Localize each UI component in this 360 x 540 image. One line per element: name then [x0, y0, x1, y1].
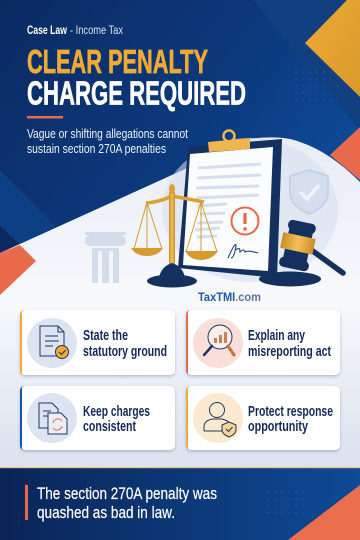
subtitle: [27, 127, 188, 156]
icon: magnifier chart: [204, 325, 234, 355]
footer band: [0, 467, 360, 540]
document lines: [195, 164, 261, 237]
title: [27, 43, 246, 112]
card: keep charges consistent: [20, 386, 175, 450]
card: explain any misreporting act: [186, 310, 340, 375]
footer accent bar: [25, 485, 28, 520]
card: keep charges consistent: Keep charges: [83, 404, 150, 420]
breadcrumb: [27, 25, 123, 37]
clipboard paper: [183, 147, 273, 271]
soft halo behind illustration: [162, 138, 338, 282]
scales of justice: [131, 184, 218, 288]
footer statement: [37, 485, 217, 522]
gavel: [259, 218, 343, 286]
card: state the statutory ground: statutory ground: [83, 344, 167, 360]
subtitle: sustain section 270A penalties: [27, 142, 166, 156]
orange right triangle: [330, 127, 360, 180]
clipboard: [178, 130, 282, 278]
title: CLEAR PENALTY: [27, 43, 208, 80]
floor highlight: [0, 276, 360, 310]
alert icon: [232, 208, 258, 234]
breadcrumb: Case Law: [27, 25, 67, 37]
card: protect response opportunity: opportunity: [248, 419, 308, 435]
card: protect response opportunity: [186, 386, 340, 450]
card: explain any misreporting act: Explain any: [248, 328, 305, 344]
breadcrumb: - Income Tax: [70, 25, 123, 37]
card: state the statutory ground: [20, 310, 175, 375]
icon: pillar: [85, 232, 126, 283]
clipboard clip: [208, 130, 250, 152]
title underline: [27, 116, 63, 118]
icon: documents sync: [39, 403, 67, 434]
subtitle: Vague or shifting allegations cannot: [27, 127, 188, 141]
footer statement: quashed as bad in law.: [37, 504, 175, 522]
gold corner shape: [305, 0, 360, 97]
icon: document check: [40, 326, 68, 358]
card: state the statutory ground: State the: [83, 328, 128, 344]
card: keep charges consistent: consistent: [83, 419, 136, 435]
orange left shape: [0, 245, 36, 295]
icon: shield: [290, 170, 328, 214]
footer statement: The section 270A penalty was: [37, 485, 217, 503]
logo: TaxTMI.com: [198, 290, 261, 304]
card: explain any misreporting act: misreporting act: [248, 344, 331, 360]
header background: [0, 0, 360, 300]
icon: person shield: [204, 402, 236, 437]
signature: [228, 244, 258, 258]
light lower background: [0, 137, 360, 470]
title: CHARGE REQUIRED: [27, 74, 246, 112]
